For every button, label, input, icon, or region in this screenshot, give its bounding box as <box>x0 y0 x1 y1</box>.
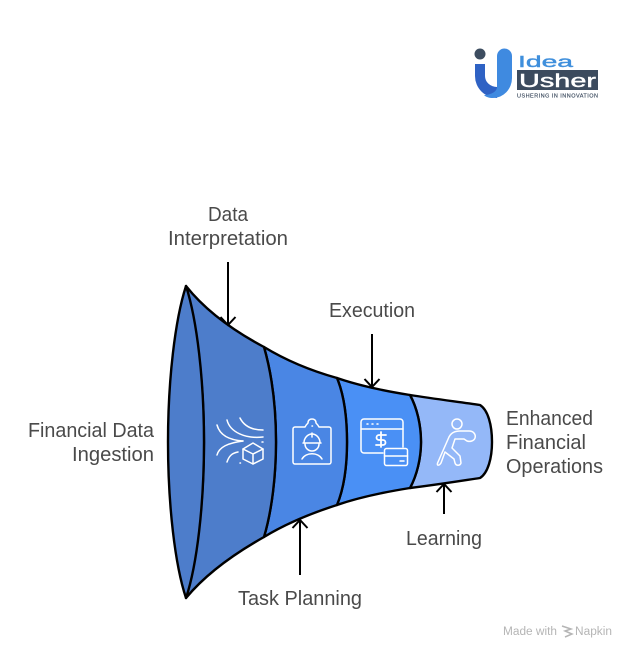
label: Execution: Execution <box>329 300 415 322</box>
icon: payment window and card <box>361 419 408 466</box>
label: Financial Data Ingestion: Financial Data <box>28 420 155 442</box>
funnel <box>168 286 492 598</box>
label: Data Interpretation: Interpretation <box>168 228 288 250</box>
label: Enhanced Financial Operations: Financial <box>506 432 586 454</box>
logo: Idea Usher: USHERING IN INNOVATION <box>517 94 598 100</box>
segment: Execution <box>337 378 421 505</box>
watermark: Made with Napkin: Made with <box>503 626 557 638</box>
arrow: Task Planning <box>292 520 308 575</box>
label: Enhanced Financial Operations: Enhanced <box>506 408 593 430</box>
segment: Financial Data Ingestion <box>168 286 204 598</box>
watermark: Made with Napkin <box>503 626 612 638</box>
label: Financial Data Ingestion: Ingestion <box>72 444 154 466</box>
watermark: Made with Napkin: Napkin <box>575 626 612 638</box>
label: Data Interpretation: Data <box>208 204 249 226</box>
label: Task Planning: Task Planning <box>238 588 362 610</box>
label: Learning: Learning <box>406 528 482 550</box>
logo: Idea Usher <box>474 48 598 100</box>
segment: Learning <box>410 395 492 488</box>
arrow: Data Interpretation <box>220 262 236 325</box>
icon: figure in motion <box>437 419 475 465</box>
arrow: Execution <box>364 334 380 387</box>
logo: Idea Usher: Usher <box>519 71 596 91</box>
logo: Idea Usher: Idea <box>518 54 573 71</box>
label: Enhanced Financial Operations: Operations <box>506 456 603 478</box>
icon: data flows and cube <box>217 418 263 464</box>
icon: worker badge <box>293 419 331 464</box>
segment: Task Planning <box>264 347 347 537</box>
segment: Data Interpretation <box>186 286 276 598</box>
arrow: Learning <box>436 484 452 514</box>
